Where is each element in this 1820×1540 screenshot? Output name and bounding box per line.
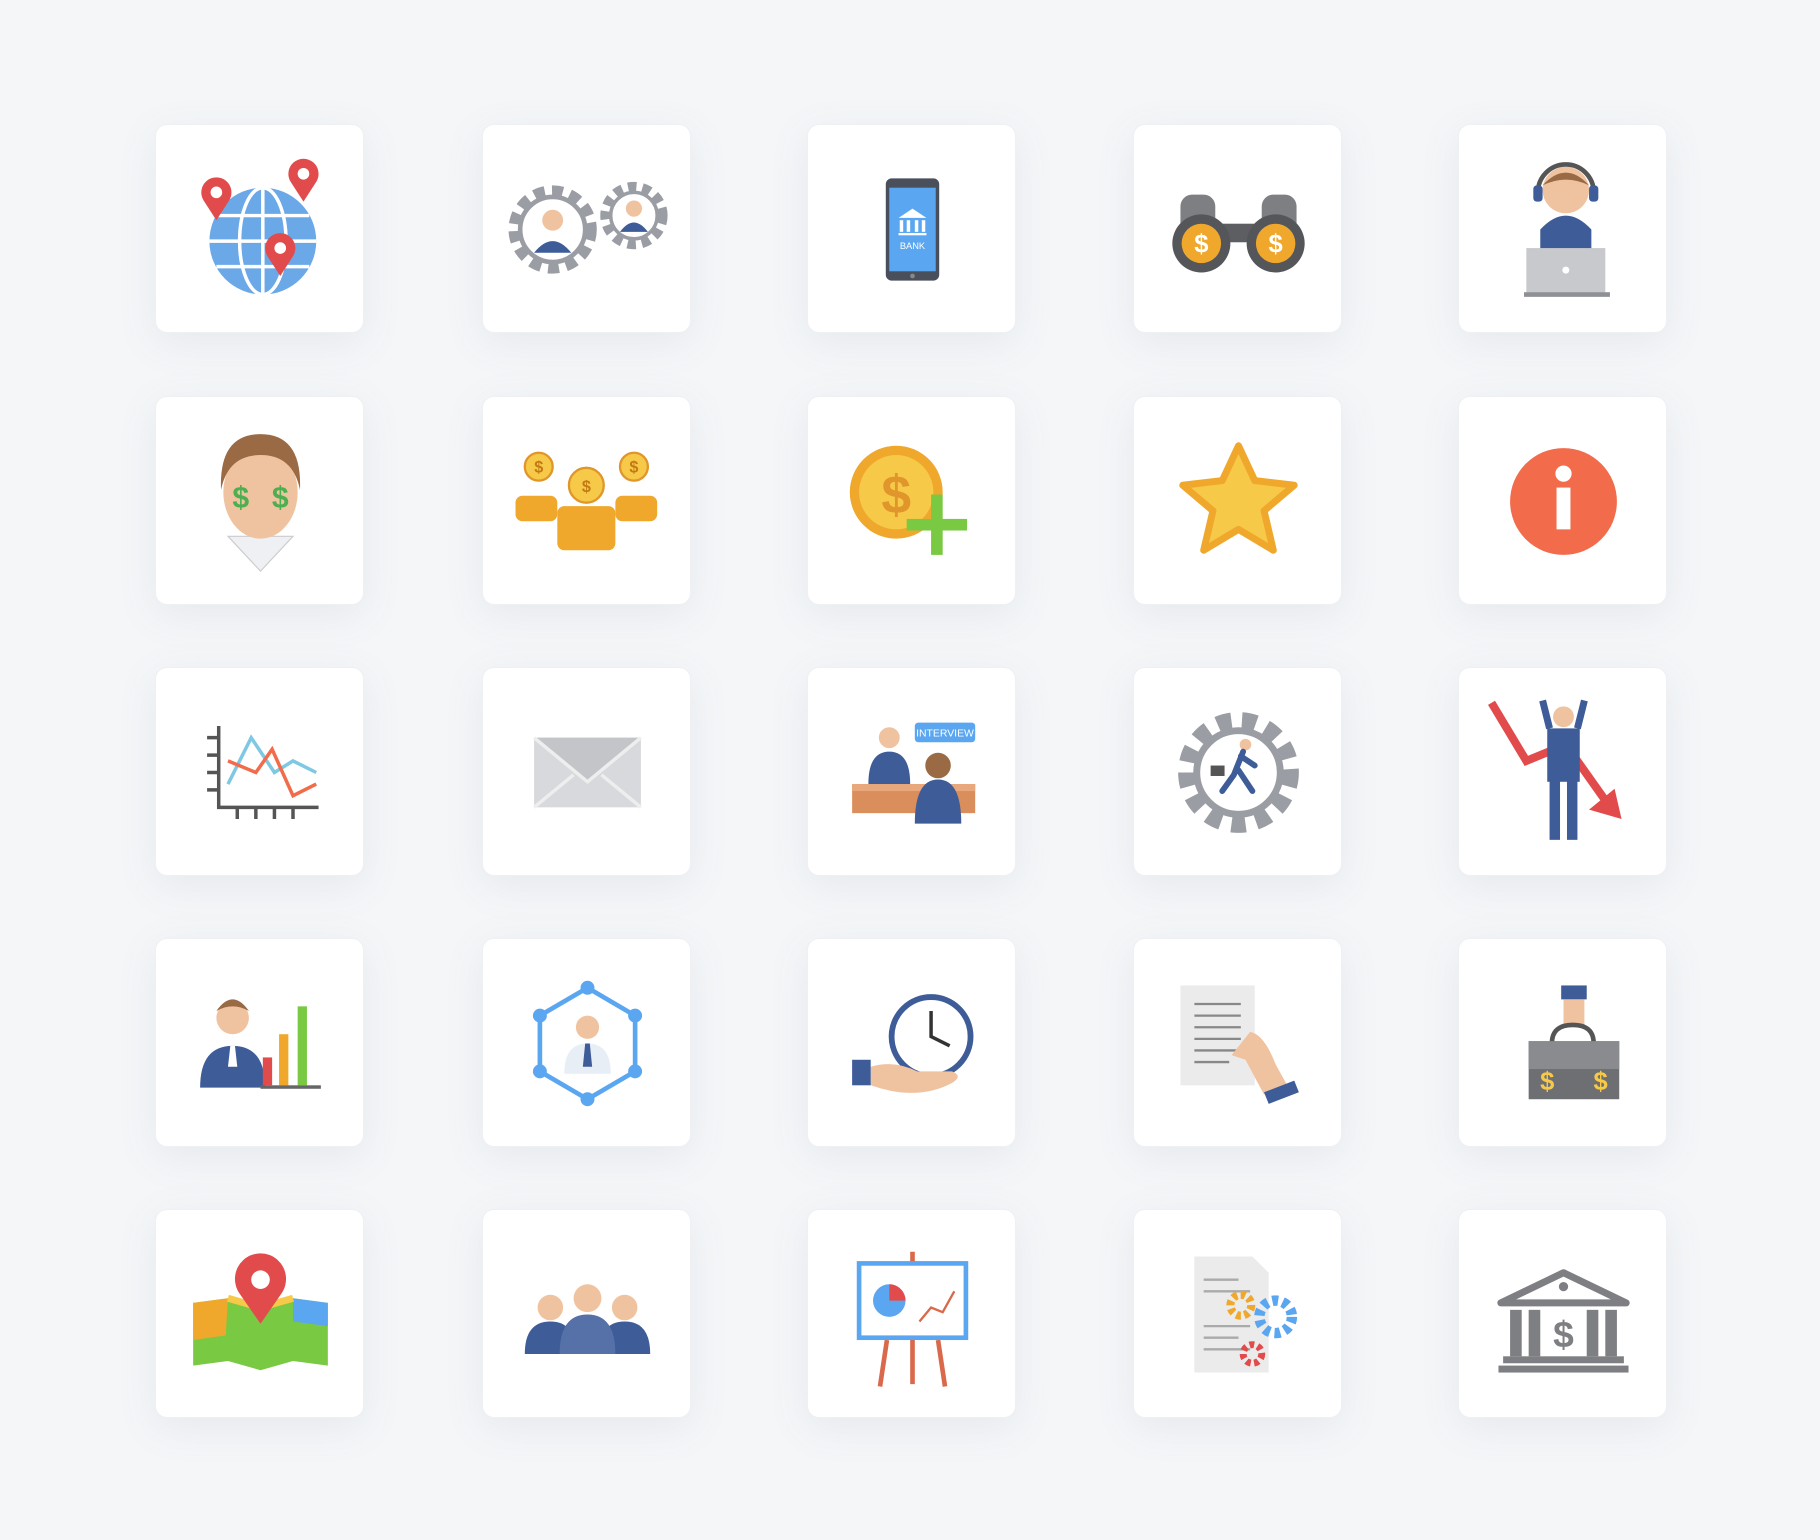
card: man with falling arrow [1458,667,1667,876]
card: team of investors: $ [534,458,543,476]
card: money-minded face: $ [232,481,249,514]
card: presentation easel [807,1209,1016,1418]
card: add money: $ [881,466,911,525]
card: mobile bank: BANK [900,241,926,251]
card: bank building: $ [1553,1313,1574,1355]
card: bank building [1458,1209,1667,1418]
card: man with bar chart [155,938,364,1147]
card: money-minded face [155,396,364,605]
card: star [1133,396,1342,605]
card: network hexagon [482,938,691,1147]
card: binoculars: $ [1269,231,1283,259]
card: info [1458,396,1667,605]
card: interview [807,667,1016,876]
card: briefcase [1458,938,1667,1147]
card: mobile bank [807,124,1016,333]
card: add money [807,396,1016,605]
card: briefcase: $ [1540,1068,1554,1096]
card: map with pin [155,1209,364,1418]
card: document settings [1133,1209,1342,1418]
card: gears with people [482,124,691,333]
card: interview: INTERVIEW [916,729,974,740]
card: binoculars: $ [1194,231,1208,259]
card: support person with laptop [1458,124,1667,333]
card: globe with pins [155,124,364,333]
card: money-minded face: $ [272,481,289,514]
card: business gear runner [1133,667,1342,876]
card: binoculars [1133,124,1342,333]
card: document in hand [1133,938,1342,1147]
card: team of investors [482,396,691,605]
card: team of three [482,1209,691,1418]
card: time in hand [807,938,1016,1147]
card: line chart [155,667,364,876]
card: briefcase: $ [1594,1068,1608,1096]
card: team of investors: $ [629,458,638,476]
card: envelope [482,667,691,876]
card: team of investors: $ [582,478,591,496]
